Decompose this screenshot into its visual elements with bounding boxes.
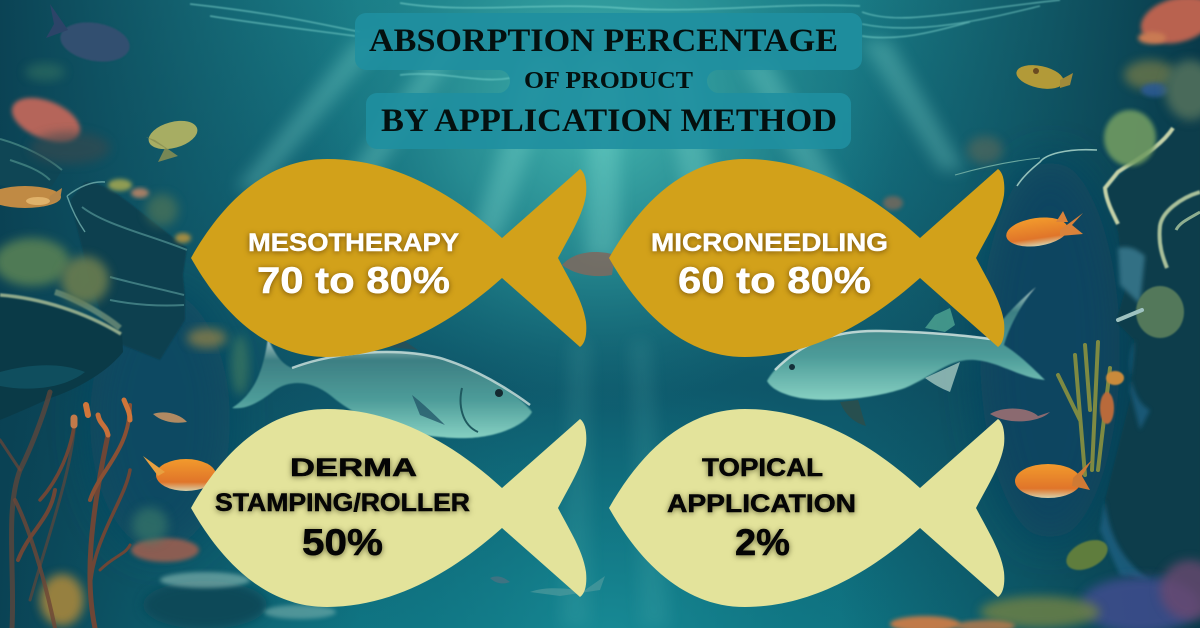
panel: derma stamping fish — [191, 409, 586, 607]
teal fish — [530, 576, 605, 596]
faint fish — [490, 576, 510, 583]
orange fish left — [142, 456, 216, 491]
small background fish right — [990, 61, 1073, 421]
tan fish — [0, 186, 62, 208]
lower orange fish — [1015, 460, 1092, 498]
label: topical: TOPICAL — [702, 454, 823, 482]
branching coral — [0, 392, 130, 628]
grey mid fish — [562, 252, 615, 276]
label: stamping/roller: STAMPING/ROLLER — [215, 489, 470, 517]
tan sliver fish — [153, 412, 187, 423]
panel: topical application fish — [609, 409, 1004, 607]
label: application: APPLICATION — [667, 490, 856, 518]
value: 70 to 80%: 70 to 80% — [257, 260, 450, 301]
title panels — [355, 13, 862, 149]
label: microneedling: MICRONEEDLING — [651, 229, 888, 257]
red fish — [990, 408, 1050, 421]
right rock columns — [1100, 110, 1200, 580]
heading line 2: OF PRODUCT — [524, 68, 693, 94]
title block — [355, 13, 862, 149]
value: 60 to 80%: 60 to 80% — [678, 260, 871, 301]
upper orange fish — [1004, 211, 1083, 250]
yellow fish — [1014, 61, 1073, 93]
small background fish left — [0, 4, 615, 596]
heading line 3: BY APPLICATION METHOD — [381, 103, 837, 139]
value: 2%: 2% — [735, 522, 790, 563]
left corals and weed — [0, 63, 336, 628]
left rocks — [0, 138, 187, 420]
label: derma: DERMA — [290, 454, 417, 482]
label: mesotherapy: MESOTHERAPY — [248, 229, 459, 257]
right corals and weed — [883, 0, 1200, 628]
dark fish — [46, 4, 133, 67]
large fish right — [767, 287, 1045, 426]
value: 50%: 50% — [302, 522, 383, 563]
heading line 1: ABSORPTION PERCENTAGE — [369, 23, 838, 59]
water surface ripples — [190, 0, 1060, 80]
yellow-green fish — [145, 116, 201, 162]
orange fish right — [1004, 211, 1092, 498]
large fish left — [232, 338, 532, 438]
panel: mesotherapy fish — [191, 159, 586, 357]
light rays — [235, 40, 965, 628]
panel: microneedling fish — [609, 159, 1004, 357]
